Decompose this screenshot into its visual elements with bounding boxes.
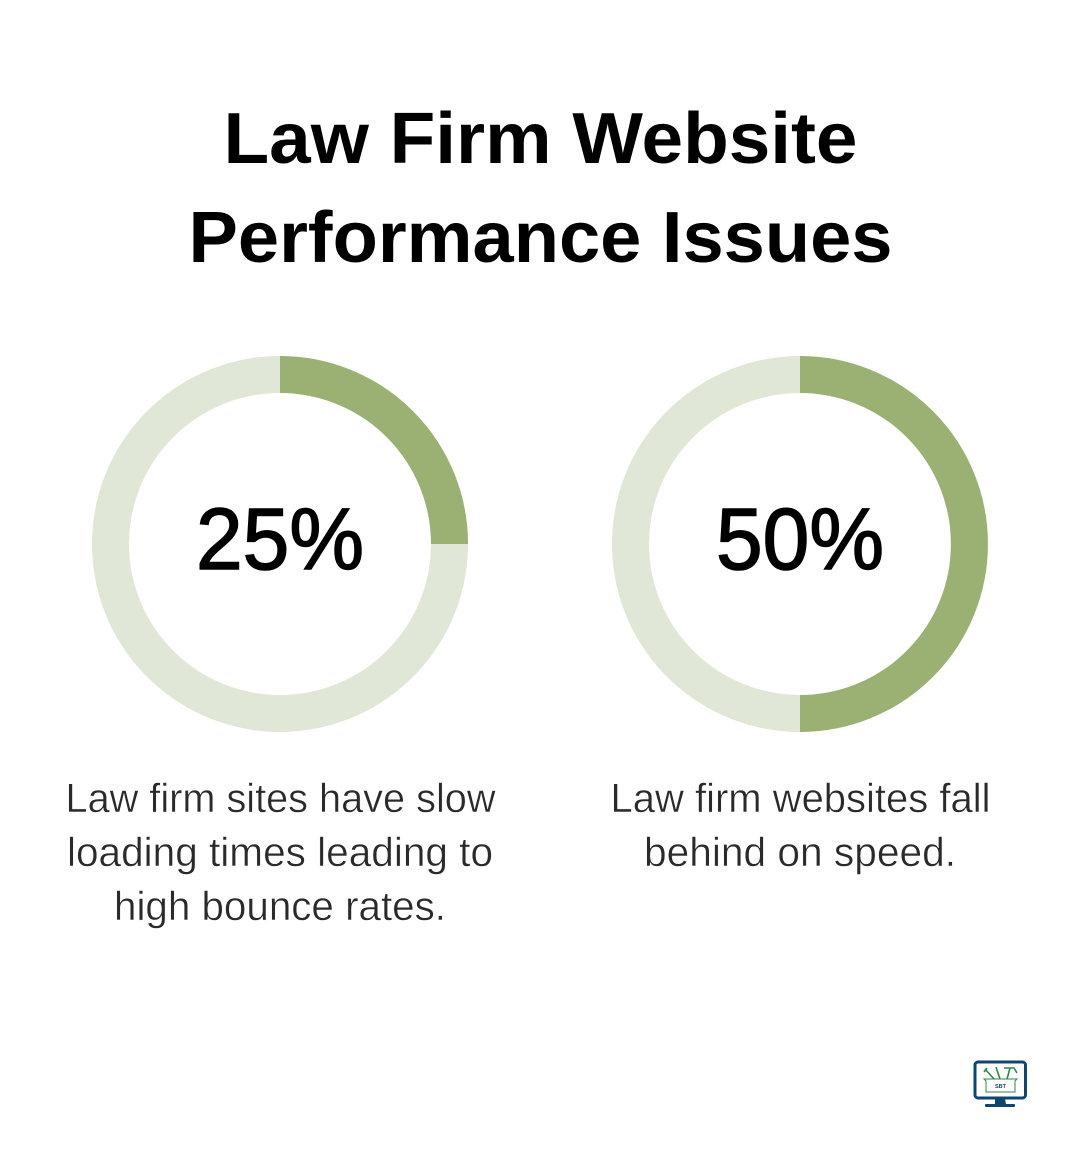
description: 25% stat: Law firm sites have slow: [66, 775, 496, 821]
panel: 25% stat: [66, 374, 496, 929]
title: Law Firm Website: [224, 99, 858, 179]
description: 25% stat: high bounce rates.: [114, 883, 446, 929]
description: 25% stat: loading times leading to: [67, 829, 493, 875]
donut chart: 50%: [630, 374, 970, 714]
icon: SBT toolbox monitor logo: SBT: [995, 1084, 1007, 1090]
panel: 50% stat: [610, 374, 990, 875]
icon: SBT toolbox monitor logo: [975, 1062, 1026, 1107]
description: 50% stat: behind on speed.: [644, 829, 956, 875]
description: 25% stat: [66, 775, 496, 929]
title: [188, 99, 892, 278]
value: 50%: 50%: [716, 491, 884, 588]
description: 50% stat: Law firm websites fall: [610, 775, 990, 821]
value: 25%: 25%: [196, 491, 364, 588]
description: 50% stat: [610, 775, 990, 875]
donut chart: 25%: [110, 374, 450, 714]
title: Performance Issues: [188, 198, 892, 278]
